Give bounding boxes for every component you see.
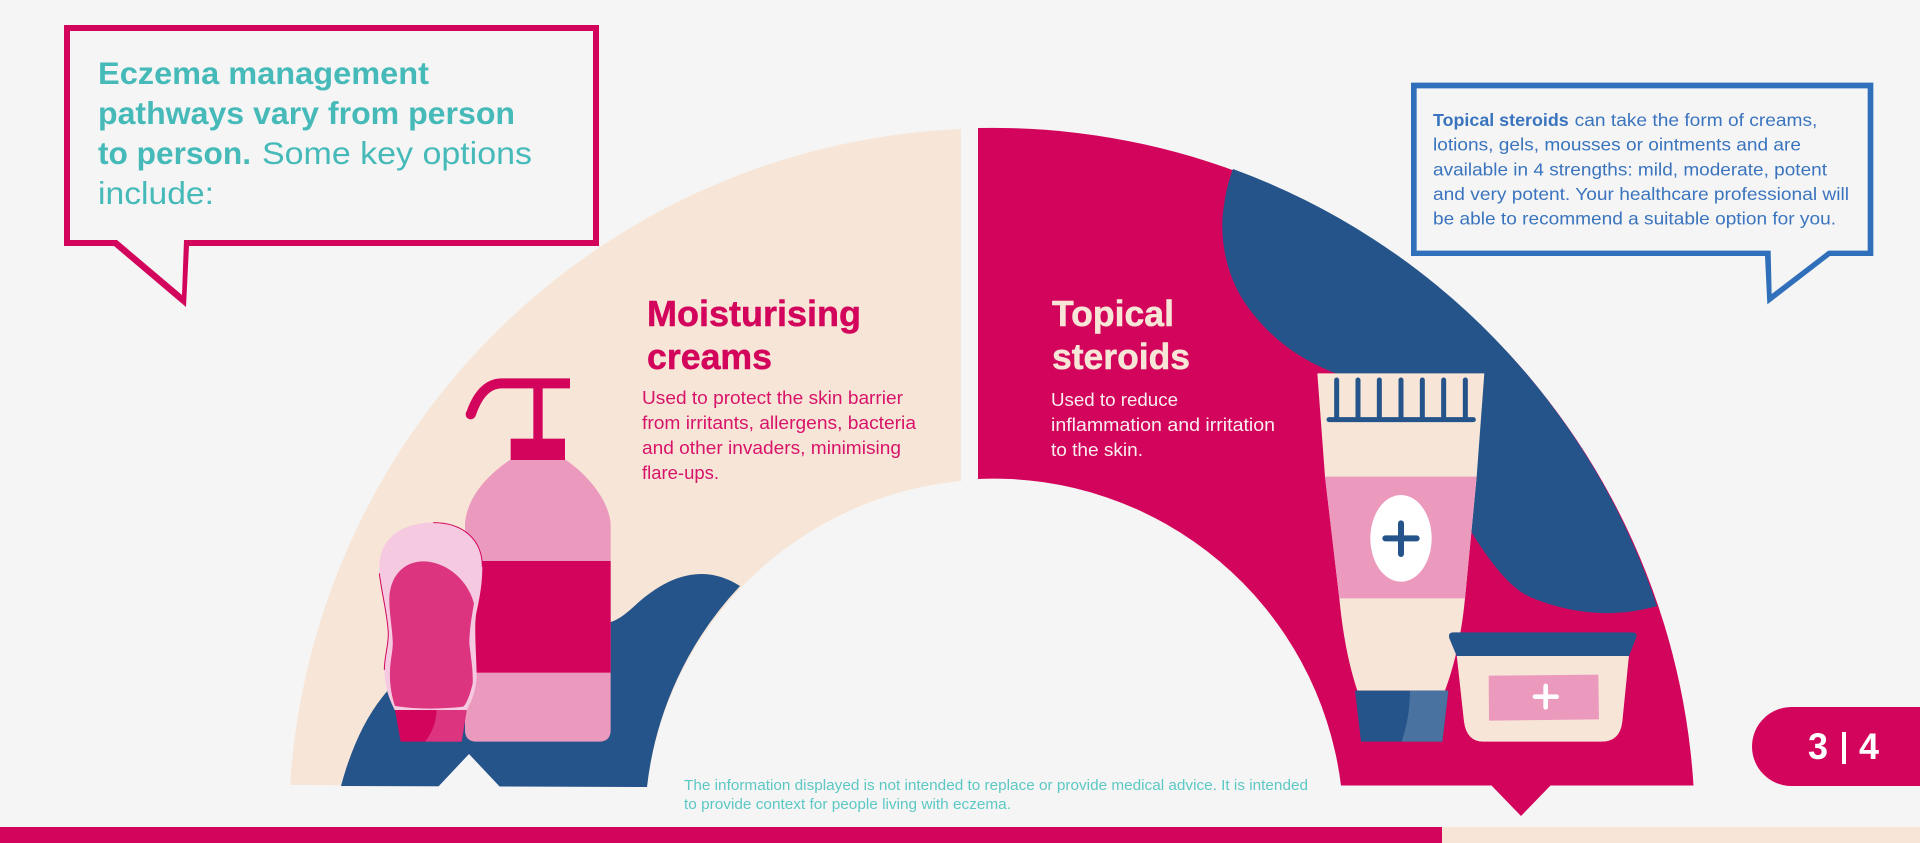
notch under bottles	[437, 754, 501, 788]
text block: disclaimer: to provide context for people living with eczema.	[684, 797, 1011, 813]
text block: moisturising creams description: and other invaders, minimising	[642, 438, 901, 458]
callout text: available in 4 strengths: mild, moderate, potent	[1433, 159, 1827, 179]
intro text	[98, 55, 532, 211]
navy blob behind tube	[1222, 169, 1657, 613]
icon: pump bottle	[465, 383, 611, 742]
pointer under arch	[1491, 785, 1551, 816]
callout text: Topical steroids	[1433, 110, 1569, 130]
callout text: lotions, gels, mousses or ointments and are	[1433, 135, 1801, 155]
intro text: Eczema management	[98, 55, 430, 91]
callout text	[1433, 110, 1849, 229]
navy blob behind bottles	[341, 574, 740, 787]
text block: disclaimer: The information displayed is not intended to replace or provide medical advice. It is intended	[684, 778, 1308, 794]
text block: moisturising creams description: Used to protect the skin barrier	[642, 388, 903, 408]
callout: topical steroids speech bubble	[1411, 83, 1873, 304]
callout: intro speech bubble	[64, 25, 599, 307]
intro text: Some key options	[262, 135, 532, 171]
heading: moisturising creams	[647, 293, 861, 377]
heading: topical steroids: steroids	[1052, 336, 1190, 377]
intro text: pathways vary from person	[98, 95, 515, 131]
footer bar	[0, 827, 1920, 843]
callout text: be able to recommend a suitable option for you.	[1433, 209, 1836, 229]
callout text: and very potent. Your healthcare professional will	[1433, 184, 1849, 204]
text block: disclaimer	[684, 778, 1308, 813]
heading: moisturising creams: creams	[647, 336, 772, 377]
text block: topical steroids description: Used to reduce	[1051, 390, 1178, 410]
heading: moisturising creams: Moisturising	[647, 293, 861, 334]
text block: moisturising creams description	[642, 388, 917, 483]
icon: cream tube	[1317, 373, 1484, 742]
page number badge: 3	[1808, 726, 1828, 767]
heading: topical steroids	[1052, 293, 1190, 377]
text block: topical steroids description: inflammation and irritation	[1051, 415, 1275, 435]
text block: moisturising creams description: flare-ups.	[642, 463, 719, 483]
page number badge	[1752, 707, 1920, 786]
intro text: to person.	[98, 135, 251, 171]
panel: moisturising creams arch	[290, 129, 961, 788]
panel: topical steroids arch	[978, 128, 1694, 816]
icon: cream jar	[1449, 632, 1637, 742]
text block: moisturising creams description: from irritants, allergens, bacteria	[642, 413, 917, 433]
intro text: include:	[98, 175, 214, 211]
icon: squeeze tube	[379, 523, 482, 742]
page number badge: 4	[1859, 726, 1879, 767]
callout text: can take the form of creams,	[1575, 110, 1817, 130]
heading: topical steroids: Topical	[1052, 293, 1174, 334]
text block: topical steroids description	[1051, 390, 1275, 460]
text block: topical steroids description: to the skin.	[1051, 440, 1143, 460]
